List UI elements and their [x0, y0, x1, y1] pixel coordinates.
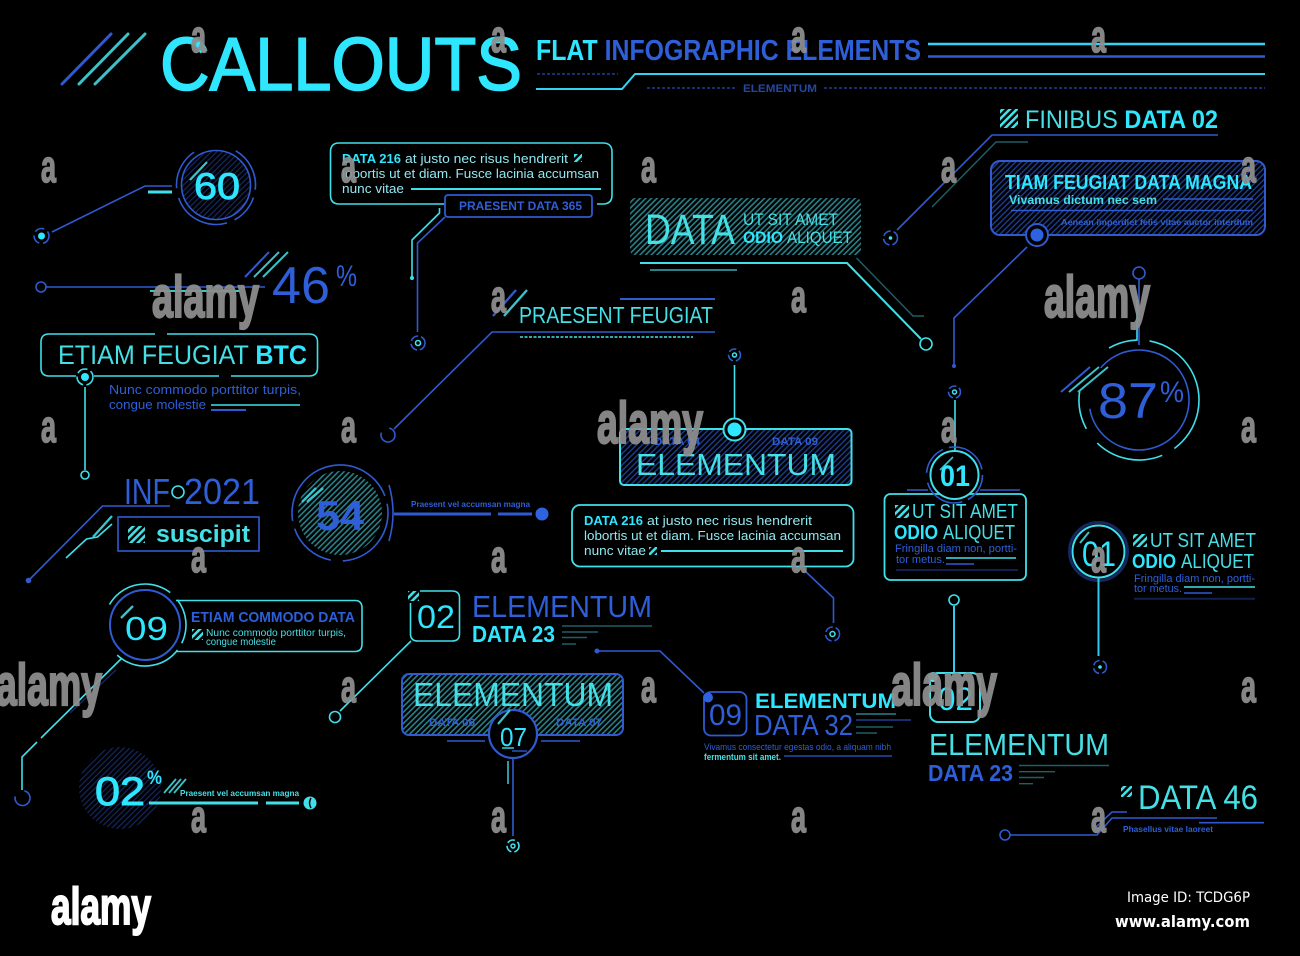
- watermark: a: [941, 401, 957, 452]
- node: [304, 796, 316, 810]
- connector: [22, 658, 122, 790]
- text: ALIQUET: [787, 228, 852, 247]
- text: tor metus.: [896, 554, 945, 566]
- callout: data 46: [1000, 779, 1264, 840]
- text: at justo nec risus hendrerit: [647, 513, 812, 528]
- panel: [620, 429, 852, 485]
- badge: [926, 447, 982, 503]
- callout: 60: [34, 131, 270, 244]
- text: Fringilla diam non, portti-: [1134, 573, 1255, 585]
- heading: ELEMENTUM: [636, 447, 836, 482]
- badge: 02: [417, 599, 455, 635]
- connector: [1098, 578, 1100, 656]
- value: 60: [194, 166, 240, 207]
- badge: [408, 591, 460, 641]
- watermark: a: [41, 401, 57, 452]
- label: DATA 32: [754, 710, 853, 742]
- node: [34, 228, 49, 244]
- node: [826, 627, 840, 641]
- connector: [952, 247, 1027, 368]
- watermark: a: [491, 531, 507, 582]
- node: [1026, 224, 1048, 246]
- watermark: a: [791, 11, 807, 62]
- connector: [734, 365, 736, 418]
- text: UT SIT AMET: [743, 210, 838, 229]
- tags: DATA 06: [429, 717, 475, 729]
- callout: finibus data 02: [884, 106, 1218, 245]
- gauge: [1057, 318, 1221, 482]
- watermark: a: [1091, 791, 1107, 842]
- connector: [36, 282, 265, 292]
- heading: UT SIT AMET: [912, 501, 1018, 523]
- rules: [394, 299, 715, 429]
- frame: [41, 334, 318, 376]
- badge: 01: [940, 460, 970, 493]
- heading: ELEMENTUM: [755, 690, 896, 713]
- badge: 01: [1082, 535, 1116, 574]
- watermark: a: [1241, 141, 1257, 192]
- watermark: a: [1241, 401, 1257, 452]
- icon: [192, 629, 203, 640]
- footer url: www.alamy.com: [1115, 912, 1250, 931]
- value: 02: [95, 770, 145, 814]
- node: [884, 231, 898, 245]
- frame: [572, 505, 854, 566]
- watermark: a: [791, 791, 807, 842]
- label: DATA 23: [928, 760, 1013, 786]
- tag: [445, 195, 592, 217]
- text: lobortis ut et diam. Fusce lacinia accumsan: [584, 528, 841, 543]
- value: 87: [1098, 373, 1158, 429]
- subtitle: FLAT INFOGRAPHIC ELEMENTS: [536, 35, 921, 67]
- heading: DATA 46: [1138, 779, 1258, 817]
- callout: 87%: [1057, 267, 1221, 482]
- text: lobortis ut et diam. Fusce lacinia accumsan: [342, 166, 599, 181]
- callout: 09 etiam commodo: [13, 569, 362, 808]
- connector: [330, 641, 411, 722]
- slashes: [245, 252, 288, 277]
- top connector: [1133, 267, 1145, 345]
- node: [380, 427, 396, 443]
- tag: suscipit: [156, 521, 250, 548]
- node: [172, 486, 184, 498]
- heading: ODIO: [1132, 551, 1176, 573]
- heading: 2021: [184, 471, 260, 512]
- frame: [330, 143, 612, 204]
- heading: UT SIT AMET: [1150, 530, 1256, 552]
- icon: title slashes: [62, 34, 145, 84]
- connector: [805, 571, 834, 623]
- footer image id: Image ID: TCDG6P: [1127, 890, 1250, 906]
- callout: text box top: [330, 143, 612, 350]
- badge: [1070, 522, 1128, 580]
- panel: [402, 674, 623, 735]
- heading: ETIAM COMMODO DATA: [191, 609, 355, 626]
- connector: [52, 186, 172, 232]
- tags: DATA 09: [772, 436, 818, 448]
- text: fermentum sit amet.: [704, 752, 781, 763]
- badge: [928, 672, 980, 722]
- text: DATA 216: [342, 151, 401, 166]
- callout: 01 box: [884, 386, 1026, 580]
- callout: etiam feugiat btc: [41, 334, 318, 479]
- watermark: a: [491, 11, 507, 62]
- badge: 07: [500, 722, 527, 752]
- callout: 02%: [79, 747, 316, 829]
- text: Fringilla diam non, portti-: [895, 543, 1017, 555]
- watermark: a: [1241, 661, 1257, 712]
- watermark: alamy: [152, 265, 259, 330]
- text: Nunc commodo porttitor turpis,: [109, 382, 301, 397]
- label: Phasellus vitae laoreet: [1123, 824, 1213, 834]
- callout: inf 2021: [26, 471, 260, 583]
- side rules: [907, 489, 1020, 491]
- text: congue molestie: [109, 397, 206, 412]
- slashes: [493, 290, 527, 316]
- heading: ELEMENTUM: [413, 676, 613, 713]
- watermark: a: [341, 661, 357, 712]
- connector: [81, 387, 89, 479]
- watermark: a: [191, 531, 207, 582]
- connector: [949, 595, 959, 672]
- watermark: a: [491, 791, 507, 842]
- heading: PRAESENT FEUGIAT: [519, 302, 713, 328]
- connector: [26, 506, 170, 583]
- icon: [1121, 786, 1132, 797]
- callout: 02%: %: [147, 768, 162, 789]
- node: [411, 336, 425, 350]
- watermark: alamy: [0, 653, 102, 718]
- callout: 46%: [36, 252, 357, 315]
- callout: 01 right: [1070, 522, 1256, 674]
- callout: elementum data 09: [620, 349, 852, 485]
- frame: [176, 600, 362, 652]
- tags: DATA 04: [654, 436, 701, 448]
- badge: [489, 710, 537, 758]
- connector: [640, 258, 932, 350]
- value: 54: [316, 492, 365, 539]
- watermark: a: [1091, 531, 1107, 582]
- heading: INF: [124, 471, 170, 512]
- panel: [991, 161, 1265, 235]
- badge: 02: [938, 681, 973, 717]
- connector: [954, 400, 956, 451]
- callout: elementum 07: [402, 674, 623, 852]
- heading: ALIQUET: [1181, 551, 1254, 573]
- watermark: a: [641, 661, 657, 712]
- connector: [594, 648, 704, 693]
- connectors: [410, 208, 445, 332]
- node: [948, 386, 960, 398]
- icon: [1000, 109, 1018, 128]
- top node: [728, 349, 740, 361]
- heading: DATA: [645, 206, 735, 254]
- slashes: [1061, 367, 1108, 392]
- slashes: [164, 779, 186, 793]
- callout: tiam panel: [952, 161, 1265, 368]
- node: [77, 369, 93, 385]
- gauge: [288, 461, 393, 565]
- badge: [89, 569, 201, 681]
- side rules: [447, 740, 580, 742]
- main node: [724, 418, 746, 440]
- text: DATA 216: [584, 513, 643, 528]
- frame: [884, 494, 1026, 580]
- gauge ring: [162, 131, 270, 239]
- badge: 09: [125, 610, 168, 647]
- heading: ODIO: [894, 522, 938, 544]
- label: DATA 23: [472, 621, 555, 647]
- node: [507, 840, 519, 852]
- sub text: Vivamus dictum nec sem: [1009, 193, 1157, 207]
- watermark: a: [191, 11, 207, 62]
- badge: [703, 692, 746, 736]
- callout: 87%: %: [1160, 376, 1184, 409]
- footer logo: alamy: [51, 878, 151, 936]
- watermark: a: [641, 141, 657, 192]
- small text: Aenean imperdiet felis vitae auctor interdum: [1061, 217, 1253, 227]
- text: congue molestie: [206, 637, 276, 648]
- watermark: a: [341, 141, 357, 192]
- connector: [897, 135, 1218, 230]
- panel: [630, 198, 861, 255]
- callout: data hatch panel: [630, 198, 932, 350]
- callout: text box middle: [572, 505, 854, 641]
- rules: [562, 626, 652, 644]
- watermark: alamy: [597, 391, 703, 456]
- node: [13, 788, 32, 808]
- text: Nunc commodo porttitor turpis,: [206, 628, 346, 639]
- text: nunc vitae: [342, 181, 404, 196]
- watermark: a: [191, 791, 207, 842]
- tags: DATA 07: [556, 717, 602, 729]
- watermark: alamy: [1044, 265, 1150, 330]
- tag: PRAESENT DATA 365: [459, 199, 582, 213]
- text: nunc vitae: [584, 543, 646, 558]
- watermark: a: [791, 531, 807, 582]
- heading: ELEMENTUM: [929, 727, 1109, 762]
- connector: [394, 508, 548, 520]
- rules: [1011, 199, 1253, 210]
- node: [1094, 660, 1106, 674]
- callout: 02 elementum right: [928, 595, 1109, 786]
- text: at justo nec risus hendrerit: [405, 151, 568, 166]
- watermark: a: [941, 141, 957, 192]
- heading: ELEMENTUM: [472, 589, 652, 624]
- watermark: a: [491, 271, 507, 322]
- watermark: a: [341, 401, 357, 452]
- badge: 09: [709, 699, 742, 732]
- label: Praesent vel accumsan magna: [411, 499, 530, 509]
- label: Praesent vel accumsan magna: [180, 788, 299, 798]
- icon: [895, 505, 909, 518]
- header rules: [536, 44, 1265, 89]
- hatch disc: [79, 747, 161, 829]
- watermark: alamy: [891, 653, 997, 718]
- callout: 09 elementum data 32: [594, 648, 911, 763]
- rules: [856, 714, 911, 733]
- callout: 46%: %: [336, 260, 357, 293]
- rules: [1019, 766, 1109, 784]
- value: 46: [272, 257, 330, 315]
- icon: [1133, 534, 1147, 547]
- rule: [149, 802, 299, 804]
- watermark: a: [1091, 11, 1107, 62]
- text: tor metus.: [1134, 583, 1182, 595]
- heading: FINIBUS DATA 02: [1025, 106, 1218, 134]
- heading: ALIQUET: [943, 522, 1015, 544]
- header tag: ELEMENTUM: [743, 83, 817, 95]
- heading: TIAM FEUGIAT DATA MAGNA: [1005, 172, 1252, 194]
- connector: [1000, 812, 1264, 840]
- connector: [508, 758, 513, 836]
- callout: praesent feugiat: [380, 290, 715, 443]
- title: CALLOUTS: [160, 22, 522, 106]
- text: Vivamus consectetur egestas odio, a aliquam nibh: [704, 742, 891, 753]
- callout: 02 elementum left: [330, 589, 652, 722]
- header: [62, 22, 1265, 106]
- heading: ETIAM FEUGIAT BTC: [58, 340, 307, 370]
- watermark: a: [791, 271, 807, 322]
- callout: 54: [288, 461, 548, 565]
- tag: [118, 517, 259, 551]
- text: ODIO: [743, 228, 783, 247]
- watermark: a: [41, 141, 57, 192]
